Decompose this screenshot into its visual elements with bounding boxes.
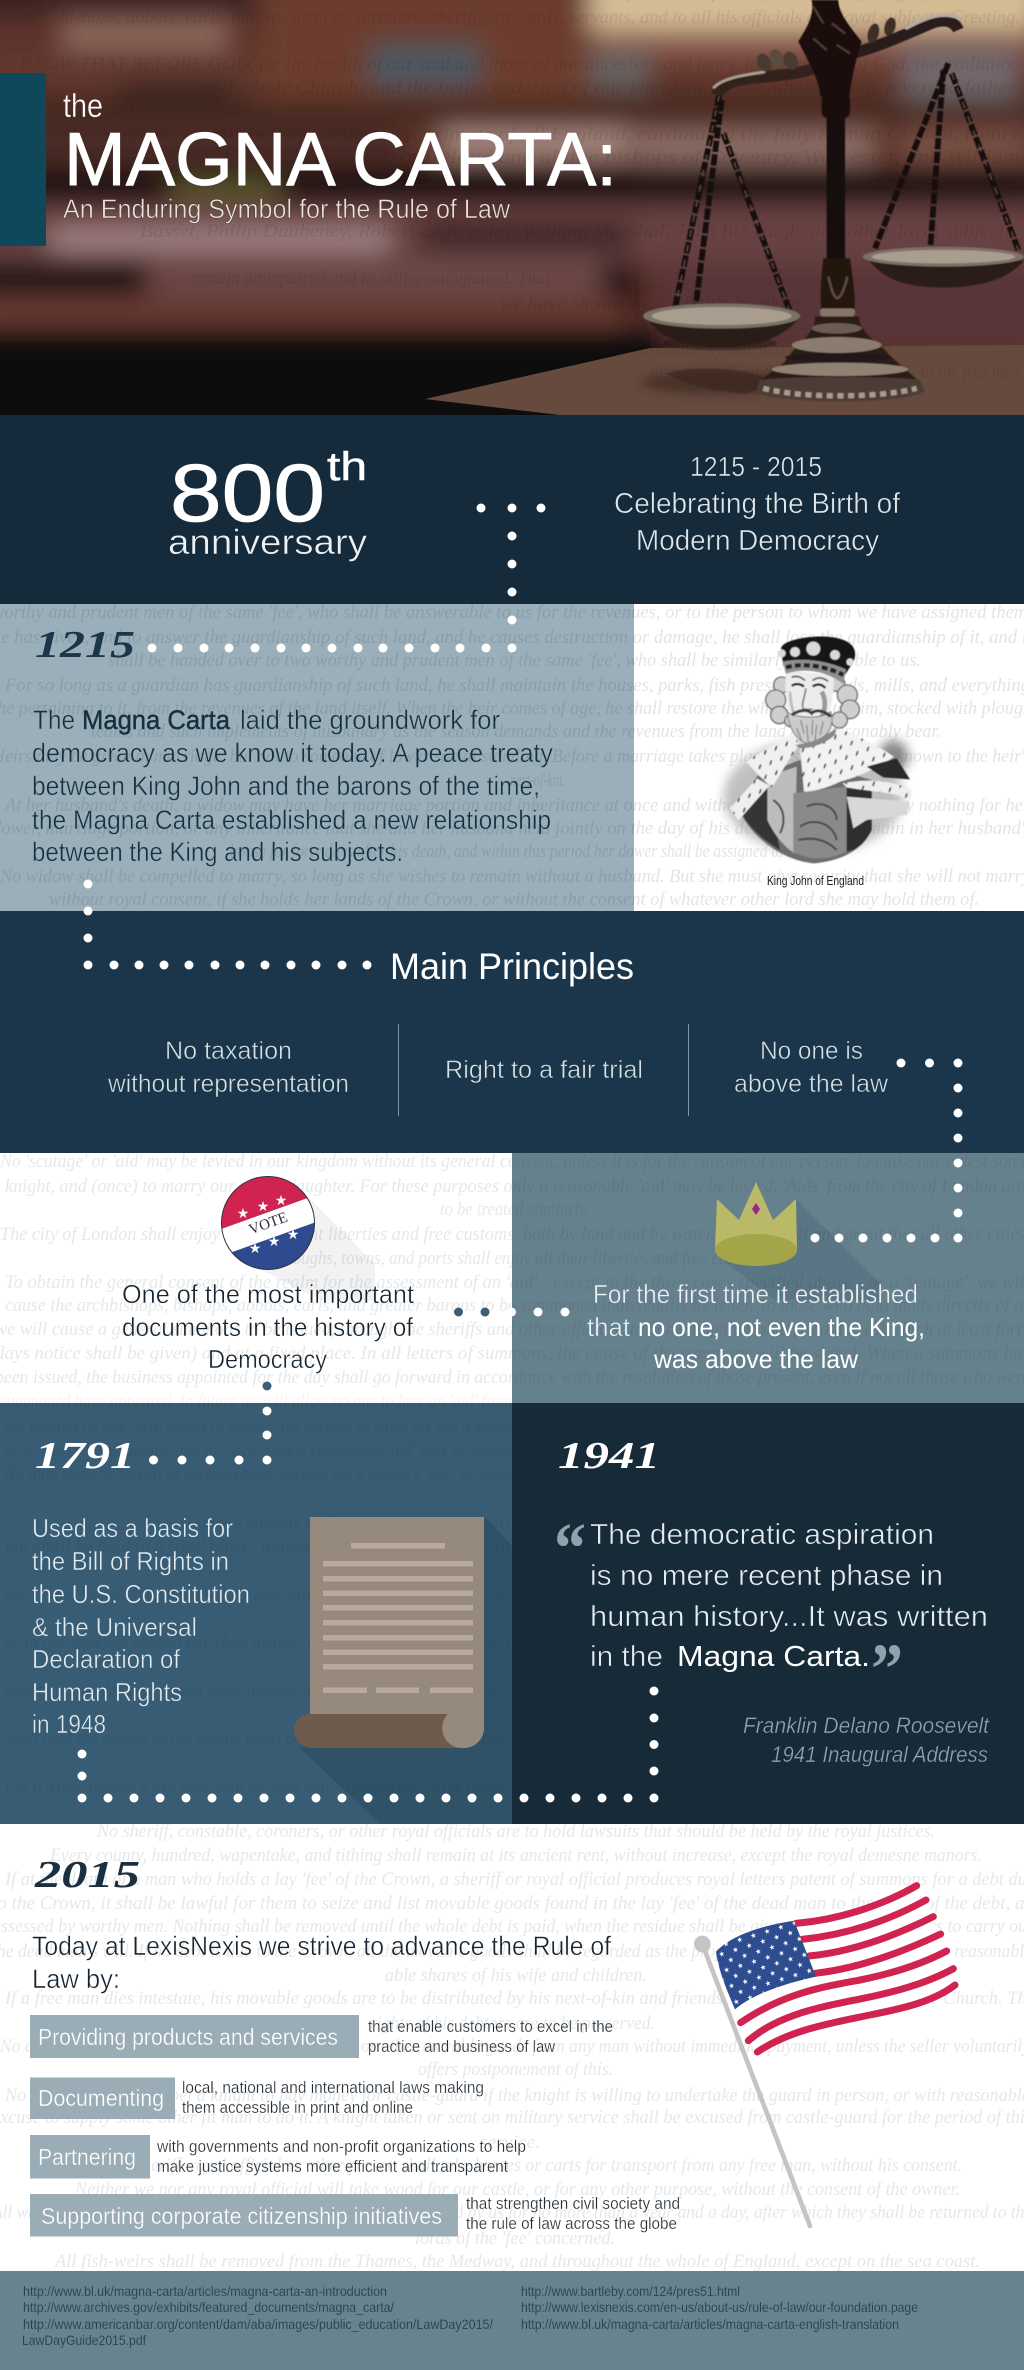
body text: 1215: between the King and his subjects. <box>32 837 403 867</box>
panel: 1791 and 1941: the pledges or free men, unless to ransom his person, to make his son a knight <box>5 1416 516 1437</box>
principle: no taxation: without representation <box>107 1070 349 1098</box>
text: bill of rights: Declaration of <box>32 1644 181 1674</box>
text: no one above the law: For the first time it established <box>593 1279 918 1309</box>
panel: 1791 and 1941: or in our absence abroad our chief justice, will send two justices to each <box>5 1632 510 1653</box>
panel: 1791 and 1941: shall hold the assizes in the county court on the day and place of the court <box>5 1728 511 1749</box>
panel: footer sources: http://www.bl.uk/magna-carta/articles/magna-carta-an-introduction <box>23 2283 387 2299</box>
panel: hero photo with title: Stephen, archbishop of Canterbury, primate of all England, cardinal of the holy Roman Church, Henry <box>100 124 1021 145</box>
item: providing products and services: that enable customers to excel in the <box>368 2017 613 2036</box>
opening quote mark: “ <box>554 1508 586 1588</box>
principle: no one above the law <box>734 1037 889 1098</box>
panel: 1215: For so long as a guardian has guardianship of such land, he shall maintain the houses, parks, fish preserves, ponds, mills, and everything <box>4 675 1024 696</box>
illustration: King John of England engraving <box>723 637 912 863</box>
panel: 1215: house for forty days after his death, and within this period her dower shall be assigned to her. <box>230 841 810 862</box>
text: most important documents: Democracy <box>208 1344 327 1374</box>
800th anniversary label: th <box>327 445 367 489</box>
panel: 2015: Neither we nor any royal official will take wood for our castle, or for any other purpose, without the consent of the owner. <box>74 2179 960 2200</box>
text: bill of rights: the U.S. Constitution <box>32 1579 250 1609</box>
quote: Roosevelt: ” <box>871 1629 903 1709</box>
item: documenting <box>30 2078 484 2119</box>
panel: 2015 <box>0 1821 1024 2272</box>
item: supporting corporate citizenship <box>30 2194 680 2236</box>
panel: 1791 and 1941: For a trivial offence a free man shall be fined only in proportion to the degree <box>4 1776 510 1797</box>
panel: 2015: All fish-weirs shall be removed from the Thames, the Medway, and throughout the whole of England, except on the sea coast. <box>53 2251 980 2272</box>
panel: hero photo with title: of the holy Church, and the better ordering of our kingdom, at the advice of our reverend fathers <box>200 77 1024 98</box>
principle: no taxation <box>107 1037 349 1098</box>
panel: vote and crown facts: to be treated similarly. <box>440 1199 590 1220</box>
title text: An Enduring Symbol for the Rule of Law <box>63 194 510 224</box>
item: partnering: make justice systems more efficient and transparent <box>157 2157 508 2176</box>
panel: vote and crown facts: boroughs, towns, and ports shall enjoy all their liberties and free customs. <box>270 1248 770 1269</box>
title text <box>63 87 617 224</box>
dotted connector path <box>78 504 962 1802</box>
panel: footer sources: LawDayGuide2015.pdf <box>22 2332 146 2348</box>
principle: no taxation: No taxation <box>165 1037 292 1065</box>
800th anniversary label: 800 <box>170 448 325 539</box>
item: providing products and services: Providing products and services <box>38 2024 338 2050</box>
panel: 2015: to the Crown, it shall be lawful for them to seize and list movable goods found in the lay 'fee' of the dead man to the value of the debt, as <box>0 1893 1024 1914</box>
stand <box>821 258 855 310</box>
title text: MAGNA CARTA: <box>64 117 617 201</box>
quote: Roosevelt: is no mere recent phase in <box>590 1560 943 1592</box>
year: 1215: 1215 <box>35 624 135 666</box>
panel: 1791 and 1941: but shall be held in a fixed place. Inquests of novel disseisin and of <box>5 1536 513 1557</box>
attribution: 1941 Inaugural Address <box>771 1742 988 1767</box>
panel: 1215: teams and such implements of husbandry as the season demands and the revenues from the land can reasonably bear. <box>91 721 941 742</box>
panel: 1791 and 1941: summoned have appeared. In future we will allow no one to levy an 'aid' from <box>0 1391 512 1412</box>
right pan <box>868 259 1024 287</box>
panel: vote and crown facts <box>0 1151 1024 1403</box>
panel: 1215: without royal consent, if she holds her lands of the Crown, or without the consent of whatever other lord she may hold them of. <box>49 889 979 910</box>
panel: hero photo with title: inviolate by our heirs in perpetuity <box>640 339 891 360</box>
800th anniversary label <box>168 445 368 562</box>
text: no one above the law <box>587 1279 925 1374</box>
body text: 1215: the Magna Carta established a new relationship <box>32 805 551 835</box>
principle: fair trial: Right to a fair trial <box>445 1056 643 1084</box>
icon: vote button: ★ <box>275 1192 287 1208</box>
celebrating the birth of modern democracy: Celebrating the Birth of <box>614 488 901 520</box>
text: most important documents: One of the most important <box>122 1279 415 1309</box>
face <box>785 670 834 725</box>
quote: Roosevelt: in the <box>590 1641 663 1673</box>
panel: 2015: Every county, hundred, wapentake, and tithing shall remain at its ancient rent, without increase, except the royal demesne manors. <box>49 1845 982 1866</box>
item: documenting: them accessible in print and online <box>182 2098 413 2117</box>
panel: hero photo with title: Basset, Philip Daubeney, Robert de Ropsley, William Marshal, John fitz Hugh, and other loyal subjects: <box>140 221 1020 242</box>
body text: 1215: between King John and the barons of the time, <box>32 771 540 801</box>
panel: hero photo with title <box>0 0 1024 440</box>
panel: hero photo with title: bishops, abbots, earls, barons, justices, foresters, sheriffs, stewards, servants, and to all his officials and loyal subjects, Greeting. <box>60 7 1020 28</box>
panel: 1215: next-of-kin. <box>510 770 565 791</box>
panel: hero photo with title: remain unimpaired and to utilise unimpaired. That <box>190 268 551 289</box>
icon: vote button: ★ <box>237 1205 249 1221</box>
attribution: Franklin Delano Roosevelt <box>743 1713 990 1738</box>
icon: scales of justice <box>643 0 1024 401</box>
celebrating the birth of modern democracy: Modern Democracy <box>636 525 879 557</box>
panel: hero photo with title: we have shown we wish this freedom <box>500 293 800 314</box>
panel: 2015: No sheriff, constable, coroners, or other royal officials are to hold lawsuits that should be held by the royal justices. <box>96 1821 935 1842</box>
post <box>827 93 845 263</box>
table top <box>425 345 1024 415</box>
item: partnering: with governments and non-profit organizations to help <box>156 2137 526 2156</box>
text: bill of rights <box>32 1513 250 1739</box>
ornament <box>798 0 862 97</box>
panel: 800th anniversary banner <box>0 415 1024 604</box>
item: documenting: Documenting <box>38 2085 164 2111</box>
panel: 1791 and 1941: county four times a year, and these justices with four knights of the county <box>5 1680 510 1701</box>
caption: King John of England: King John of England <box>767 873 864 888</box>
panel: 2015: service. <box>480 2132 540 2153</box>
item: supporting corporate citizenship: the rule of law across the globe <box>466 2214 677 2233</box>
body text: 1215: laid the groundwork for <box>240 705 500 735</box>
text: no one above the law: no one, not even the King, <box>638 1312 925 1342</box>
icon: vote button <box>221 1176 315 1270</box>
attribution <box>743 1713 990 1767</box>
item: providing products and services <box>30 2015 613 2058</box>
panel: 1791 and 1941 <box>0 1391 1024 1824</box>
icon: vote button: VOTE <box>247 1210 290 1238</box>
body text: 1215: Magna Carta <box>82 705 231 735</box>
panel: footer sources: http://www.lexisnexis.com/en-us/about-us/rule-of-law/our-foundation.page <box>521 2299 918 2315</box>
item: partnering: Partnering <box>38 2144 136 2170</box>
panel: 1791 and 1941: No man shall be forced to perform more service for a knight's 'fee', or other <box>4 1464 516 1485</box>
icon: scroll document <box>294 1517 484 1748</box>
panel: 2015: offers postponement of this. <box>418 2059 613 2080</box>
text: most important documents: documents in the history of <box>122 1312 414 1342</box>
year: 2015: 2015 <box>34 1854 140 1896</box>
icon: crown <box>715 1182 797 1266</box>
body text: 1215 <box>32 705 553 867</box>
text: bill of rights: & the Universal <box>32 1612 197 1642</box>
item: partnering <box>30 2135 526 2178</box>
panel: footer sources: http://www.americanbar.org/content/dam/aba/images/public_education/LawDay2015/ <box>23 2316 493 2332</box>
panel: vote and crown facts: days notice shall be given) and at a fixed place. In all letters of summons, the cause of the summons will be stated. When a summons has <box>0 1343 1024 1364</box>
celebrating the birth of modern democracy <box>614 451 901 557</box>
text: no one above the law: that <box>587 1312 631 1342</box>
year: 1941: 1941 <box>558 1435 660 1477</box>
text: bill of rights: the Bill of Rights in <box>32 1546 229 1576</box>
heading: Main Principles: Main Principles <box>390 946 634 987</box>
panel: main principles <box>0 911 1024 1153</box>
beard <box>787 712 832 743</box>
icon: vote button: ★ <box>257 1198 269 1214</box>
principle: no one above the law: above the law <box>734 1070 889 1098</box>
icon: vote button: ★ <box>268 1233 280 1249</box>
icon: vote button: ★ <box>287 1226 299 1242</box>
left pan <box>648 321 797 347</box>
quote: Roosevelt: The democratic aspiration <box>590 1519 934 1551</box>
body text: 1215: The <box>33 705 75 735</box>
icon: vote button: ★ <box>249 1240 261 1256</box>
panel: 1791 and 1941: or to marry his daughter, and for these only a reasonable 'aid' may be levied. <box>5 1440 515 1461</box>
intro text: Law by: <box>32 1964 120 1994</box>
panel: 1215: shall be handed over to two worthy and prudent men of the same 'fee', who shall be similarly answerable to us. <box>108 650 921 671</box>
panel: 1791 and 1941: Ordinary lawsuits shall not follow the royal court <box>180 1512 511 1533</box>
chains <box>675 63 1018 325</box>
intro text: Today at LexisNexis we strive to advance the Rule of <box>32 1931 611 1961</box>
crown <box>781 637 855 675</box>
arms <box>717 65 823 95</box>
panel: 2015: lords of the 'fee' concerned. <box>415 2228 615 2249</box>
800th anniversary label: anniversary <box>168 523 368 562</box>
item: supporting corporate citizenship: that strengthen civil society and <box>466 2194 680 2213</box>
panel: 1791 and 1941: mort d'ancestor shall be taken only in their proper county court. We ourselves <box>5 1584 510 1605</box>
year: 1791: 1791 <box>35 1435 135 1477</box>
panel: footer sources <box>0 2271 1024 2370</box>
item: documenting: local, national and international laws making <box>182 2078 484 2097</box>
panel: footer sources: http://www.bartleby.com/124/pres51.html <box>521 2283 740 2299</box>
text: bill of rights: Human Rights <box>32 1677 182 1707</box>
item: supporting corporate citizenship: Supporting corporate citizenship initiatives <box>41 2203 442 2229</box>
panel: 1215 <box>0 602 1024 911</box>
celebrating the birth of modern democracy: 1215 - 2015 <box>690 451 822 482</box>
panel: 2015: rights of his debtors are to be preserved. <box>370 2013 655 2034</box>
text: bill of rights: in 1948 <box>32 1709 106 1739</box>
text: bill of rights: Used as a basis for <box>32 1513 233 1543</box>
ermine cape <box>746 733 799 787</box>
intro text <box>32 1931 611 1994</box>
panel: footer sources: http://www.archives.gov/exhibits/featured_documents/magna_carta/ <box>23 2299 394 2315</box>
icon: American flag <box>694 1883 957 2226</box>
panel: hero photo with title: KNOW THAT BEFORE GOD, for the health of our soul and those of our ancestors and heirs, to the honour of God, the exaltation <box>19 54 1020 75</box>
panel: hero photo with title: of Ireland and all the bishops of Coventry, Worcester, and William <box>400 147 1020 168</box>
panel: 2015: able shares of his wife and children. <box>385 1965 647 1986</box>
quote: Roosevelt: Magna Carta. <box>677 1641 870 1673</box>
hair <box>766 675 859 728</box>
quote: Roosevelt: human history...It was written <box>590 1601 988 1633</box>
text: no one above the law: was above the law <box>653 1344 858 1374</box>
item: providing products and services: practice and business of law <box>368 2037 556 2056</box>
text: most important documents <box>122 1279 415 1374</box>
panel: 2015: No sheriff, royal official or other person shall take horses or carts for transport from any free man, without his consent. <box>109 2155 962 2176</box>
title text: the <box>63 87 103 124</box>
panel: footer sources: http://www.bl.uk/magna-carta/articles/magna-carta-english-translation <box>521 2316 899 2332</box>
quote: Roosevelt <box>554 1508 988 1709</box>
principle: no one above the law: No one is <box>760 1037 863 1065</box>
body text: 1215: democracy as we know it today. A peace treaty <box>32 738 553 768</box>
flag pole <box>703 1947 810 2226</box>
